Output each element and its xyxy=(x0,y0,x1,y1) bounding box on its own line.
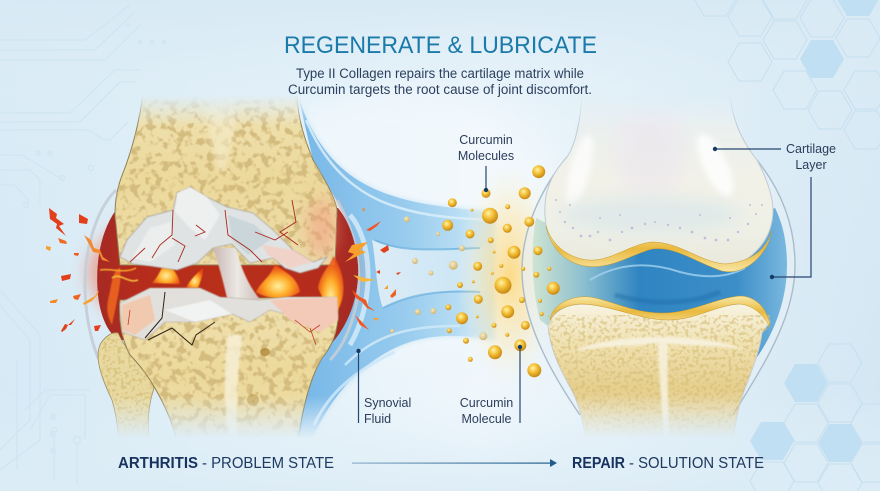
left knee: flames xyxy=(100,256,344,325)
label: cartilage layer: Layer xyxy=(795,158,827,172)
label: curcumin molecule: Curcumin xyxy=(460,396,513,410)
label: synovial fluid: Fluid xyxy=(364,412,391,426)
title: REGENERATE & LUBRICATE xyxy=(284,32,597,59)
curcumin glow xyxy=(458,165,562,385)
fibula xyxy=(98,332,154,436)
label: curcumin molecules xyxy=(458,133,514,192)
caption: problem state xyxy=(118,455,334,472)
right femur with cartilage xyxy=(545,95,773,264)
caption: problem state: - PROBLEM STATE xyxy=(202,455,334,472)
right synovial fluid chamber xyxy=(533,208,787,372)
left knee: ligament xyxy=(213,248,262,302)
caption: solution state: REPAIR xyxy=(572,455,625,472)
right joint capsule xyxy=(522,157,795,415)
tibial cracks xyxy=(145,292,215,345)
right tibia xyxy=(548,304,770,447)
arrow: problem to repair xyxy=(352,459,557,467)
right lower gold cartilage band xyxy=(550,296,770,327)
chondrocyte dots xyxy=(555,199,763,241)
label: cartilage layer xyxy=(713,142,836,279)
hexagon pattern, top right xyxy=(693,0,880,149)
label: curcumin molecule xyxy=(460,345,522,426)
label: curcumin molecules: Molecules xyxy=(458,149,514,163)
sparks, left and right of problem joint xyxy=(46,208,401,332)
label: curcumin molecule: Molecule xyxy=(461,412,512,426)
circuit dots xyxy=(35,23,166,454)
left knee bones xyxy=(90,95,343,450)
left knee: inflammation halo xyxy=(87,202,357,342)
subtitle xyxy=(288,66,592,97)
tibia xyxy=(119,296,338,436)
left knee: damaged femoral cartilage xyxy=(120,187,327,273)
left knee: capsule outline xyxy=(85,190,359,362)
right upper gold cartilage band xyxy=(546,226,772,272)
curcumin molecules xyxy=(390,165,560,377)
fluid inner pale channel xyxy=(372,240,474,308)
label: synovial fluid xyxy=(356,349,411,426)
subtitle: Curcumin targets the root cause of joint discomfort. xyxy=(288,82,592,97)
caption: solution state xyxy=(572,455,764,472)
left knee: damaged tibial cartilage xyxy=(120,288,338,345)
synovial fluid stream xyxy=(296,95,500,445)
femur xyxy=(110,95,342,267)
label: synovial fluid: Synovial xyxy=(364,396,411,410)
hexagon pattern, bottom right xyxy=(750,344,880,491)
circuit pattern, left xyxy=(0,5,140,485)
fluid highlights xyxy=(590,265,745,302)
subtitle: Type II Collagen repairs the cartilage matrix while xyxy=(296,66,584,81)
caption: problem state: ARTHRITIS xyxy=(118,455,198,472)
caption: solution state: - SOLUTION STATE xyxy=(629,455,764,472)
label: cartilage layer: Cartilage xyxy=(786,142,836,156)
cracks xyxy=(130,200,298,262)
left knee: inflamed joint space xyxy=(97,208,358,345)
label: curcumin molecules: Curcumin xyxy=(459,133,513,147)
